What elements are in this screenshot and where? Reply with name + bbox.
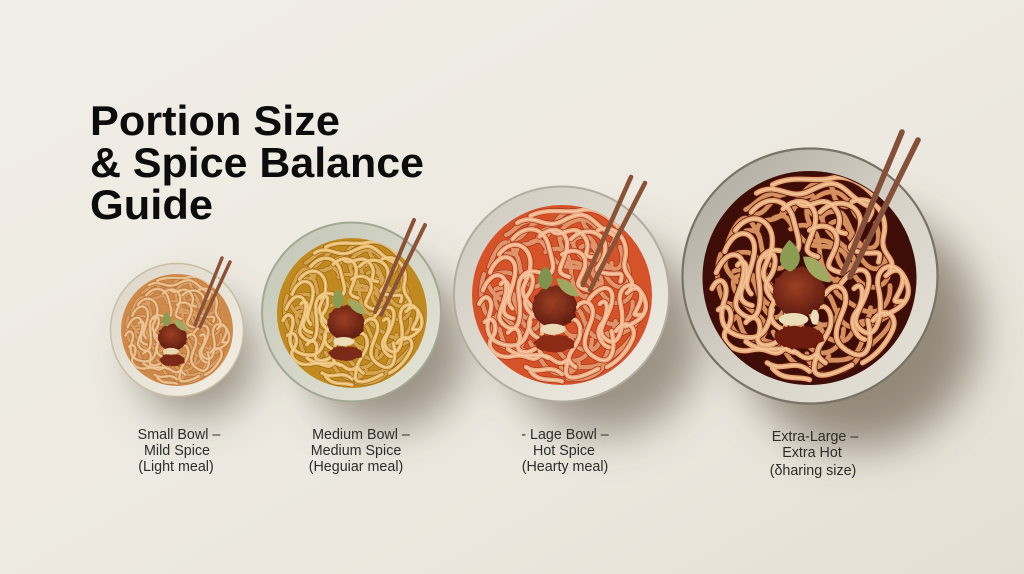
label: large bowl: Hot Spice — [533, 443, 595, 459]
bowl: medium — [257, 218, 446, 408]
title: Portion Size — [90, 97, 340, 144]
label: extra-large bowl: Extra-Large – — [772, 429, 858, 445]
title: & Spice Balance — [90, 139, 424, 186]
label: medium bowl — [309, 427, 410, 475]
bowl shadows — [136, 208, 978, 448]
label: extra-large bowl — [770, 429, 858, 479]
topping extra-large — [772, 240, 831, 349]
label: small bowl: Mild Spice — [144, 443, 210, 459]
noodles large — [476, 207, 649, 384]
chopsticks large — [583, 177, 645, 290]
label: extra-large bowl: (δharing size) — [770, 463, 856, 479]
title — [90, 97, 424, 228]
topping medium — [327, 289, 366, 361]
noodles medium — [280, 240, 424, 388]
label: extra-large bowl: Extra Hot — [782, 445, 842, 461]
chopsticks medium — [375, 220, 425, 315]
topping small — [158, 312, 187, 366]
noodles extra-large — [708, 174, 912, 383]
title: Guide — [90, 181, 213, 228]
label: small bowl: Small Bowl – — [138, 427, 220, 443]
chopsticks extra-large — [843, 132, 918, 277]
label: small bowl: (Light meal) — [138, 459, 214, 475]
label: medium bowl: Medium Spice — [311, 443, 401, 459]
label: medium bowl: (Heguiar meal) — [309, 459, 403, 475]
noodles small — [124, 275, 231, 386]
label: small bowl — [138, 427, 220, 475]
bowl: large hot — [448, 177, 675, 409]
label: large bowl — [521, 427, 609, 475]
topping large — [532, 266, 578, 353]
label: medium bowl: Medium Bowl – — [312, 427, 410, 443]
bowl: extra-large — [679, 132, 938, 408]
chopsticks small — [195, 258, 230, 327]
label: large bowl: - Lage Bowl – — [521, 427, 609, 443]
bowl: small mild — [106, 258, 247, 401]
label: large bowl: (Hearty meal) — [522, 459, 608, 475]
